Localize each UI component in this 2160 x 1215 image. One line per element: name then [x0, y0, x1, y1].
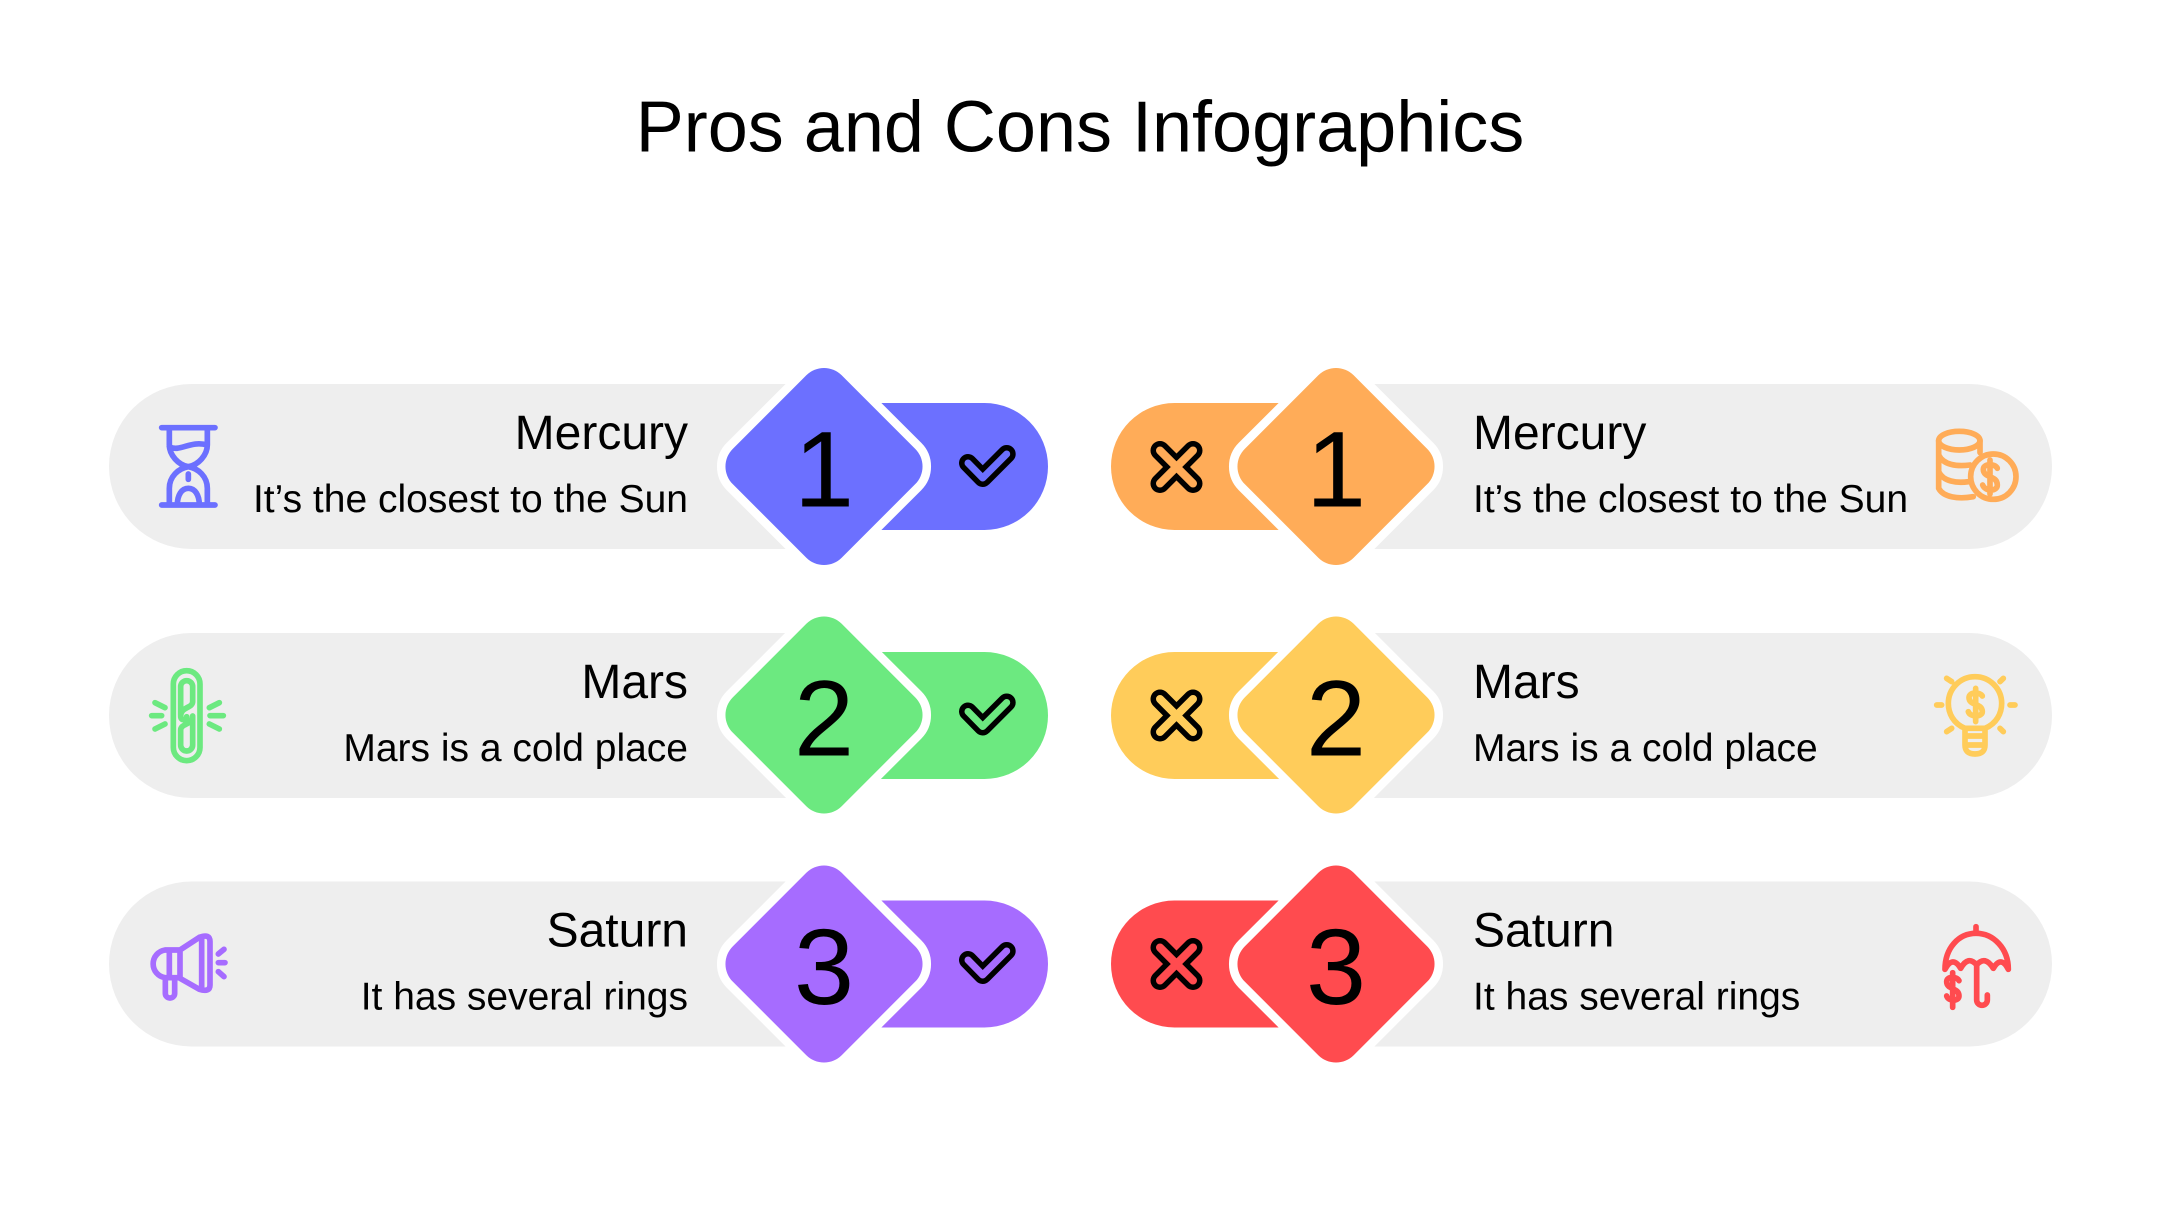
- heading: Mercury: [1473, 407, 1646, 460]
- description: It’s the closest to the Sun: [253, 478, 688, 521]
- icon: check: [968, 702, 1007, 726]
- grey pill: [109, 882, 869, 1046]
- heading: Mars: [581, 656, 688, 709]
- coloured tab: [824, 652, 1048, 779]
- description: It’s the closest to the Sun: [1473, 478, 1908, 521]
- number: 1: [794, 409, 854, 530]
- panel: pro 1 Mercury: [109, 358, 1048, 575]
- panel: con 2 Mars: [1111, 606, 2052, 824]
- icon: cross: [1160, 699, 1193, 732]
- icon: hourglass: [162, 428, 215, 505]
- coloured tab: [824, 403, 1048, 530]
- panel: con 3 Saturn: [1111, 855, 2052, 1073]
- heading: Saturn: [1473, 904, 1614, 958]
- grey pill: [109, 633, 869, 798]
- number: 3: [1306, 906, 1366, 1027]
- panel: pro 2 Mars: [109, 606, 1048, 824]
- number: 3: [794, 906, 854, 1027]
- heading: Saturn: [547, 904, 688, 958]
- description: Mars is a cold place: [343, 727, 688, 770]
- description: It has several rings: [361, 976, 688, 1018]
- number: 2: [794, 658, 854, 778]
- icon: light bulb with dollar: [1937, 677, 2015, 754]
- icon: umbrella with dollar: [1945, 927, 2008, 1007]
- icon: chain link: [152, 671, 223, 761]
- icon: megaphone: [153, 936, 225, 998]
- diamond badge: [1227, 855, 1445, 1073]
- diamond badge: [1227, 358, 1445, 575]
- grey pill: [1292, 384, 2052, 549]
- grey pill: [109, 384, 869, 549]
- grey pill: [1292, 882, 2052, 1046]
- title: Pros and Cons Infographics: [636, 88, 1524, 168]
- icon: coins: [1939, 431, 2016, 499]
- diamond badge: [715, 606, 933, 824]
- description: It has several rings: [1473, 976, 1800, 1018]
- icon: cross: [1160, 948, 1193, 980]
- icon: check: [968, 454, 1007, 478]
- description: Mars is a cold place: [1473, 727, 1818, 770]
- coloured tab: [824, 900, 1048, 1028]
- diamond badge: [1227, 606, 1445, 824]
- panel: pro 3 Saturn: [109, 855, 1048, 1073]
- coloured tab: [1111, 403, 1336, 530]
- diamond badge: [715, 358, 933, 575]
- icon: check: [968, 951, 1007, 975]
- number: 2: [1306, 658, 1366, 778]
- heading: Mars: [1473, 656, 1580, 709]
- panel: con 1 Mercury: [1111, 358, 2052, 575]
- heading: Mercury: [515, 407, 688, 460]
- coloured tab: [1111, 900, 1336, 1028]
- diamond badge: [715, 855, 933, 1073]
- coloured tab: [1111, 652, 1336, 779]
- grey pill: [1292, 633, 2052, 798]
- icon: cross: [1160, 450, 1193, 484]
- number: 1: [1306, 409, 1366, 530]
